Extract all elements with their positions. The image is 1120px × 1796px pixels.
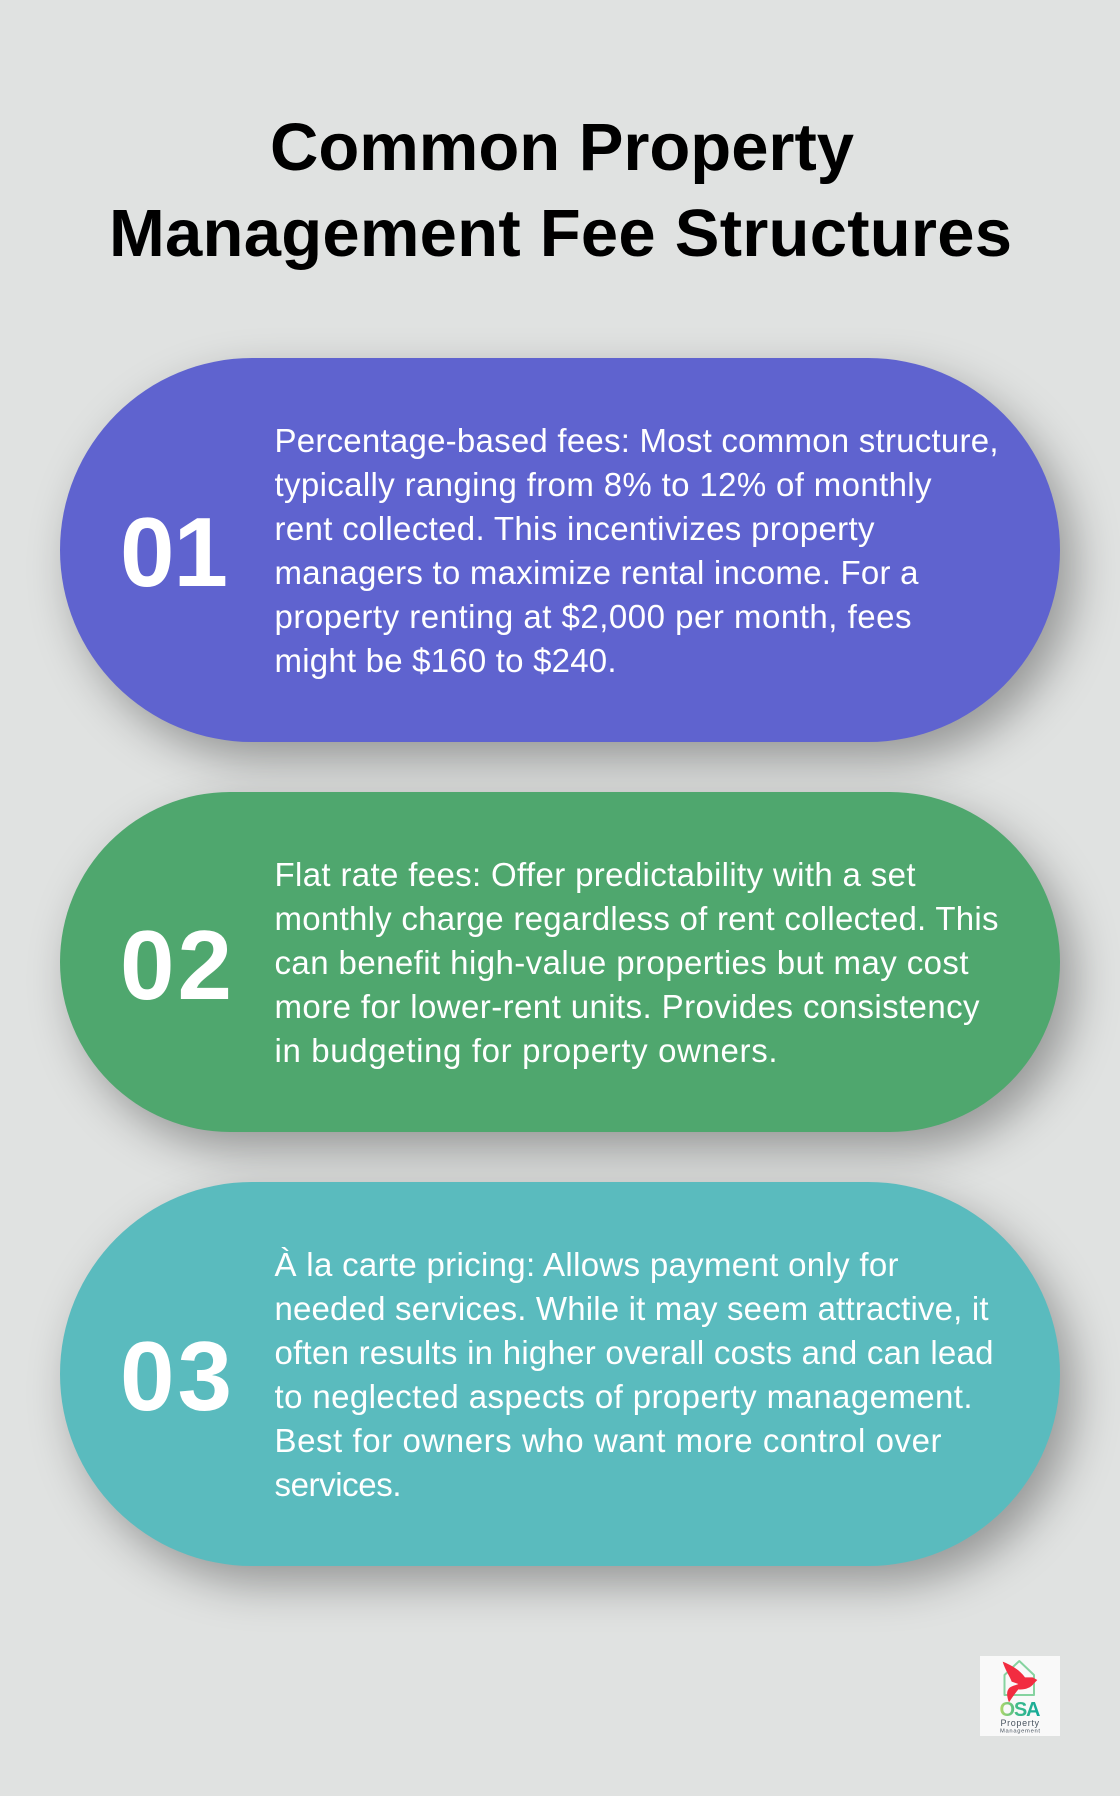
text block 02: more for lower-rent units. Provides consistency	[274, 988, 980, 1025]
logo text: OSA	[1000, 1699, 1040, 1721]
logo: OSA Property Management	[980, 1656, 1060, 1736]
title: Management Fee Structures	[109, 196, 1012, 271]
pill background 01	[60, 358, 1060, 742]
panel: percentage-based fees	[60, 358, 1060, 742]
icon: house outline	[1004, 1661, 1034, 1695]
number 01: 01	[120, 497, 228, 607]
text block 02: Flat rate fees: Offer predictability with a set	[274, 856, 916, 893]
text block 02	[274, 856, 998, 1069]
text block 03: Best for owners who want more control over	[274, 1422, 942, 1459]
text block 03: services.	[274, 1466, 402, 1503]
panel: a la carte pricing	[60, 1182, 1060, 1566]
logo text	[1000, 1699, 1040, 1734]
text block 01: managers to maximize rental income. For a	[274, 554, 919, 591]
text block 01: Percentage-based fees: Most common structure,	[274, 422, 998, 459]
title	[109, 110, 1012, 271]
text block 03: to neglected aspects of property management.	[274, 1378, 972, 1415]
logo text: Property	[1000, 1718, 1040, 1728]
panel: flat rate fees	[60, 792, 1060, 1132]
text block 02: can benefit high-value properties but may cost	[274, 944, 968, 981]
text block 01: rent collected. This incentivizes property	[274, 510, 875, 547]
icon: red bird	[1003, 1662, 1037, 1702]
number 03: 03	[120, 1321, 232, 1431]
pill background 02	[60, 792, 1060, 1132]
pill background 03	[60, 1182, 1060, 1566]
text block 01	[274, 422, 998, 679]
title: Common Property	[270, 110, 854, 185]
text block 03: often results in higher overall costs and can lead	[274, 1334, 994, 1371]
logo text: Management	[1000, 1728, 1040, 1734]
text block 01: might be $160 to $240.	[274, 642, 616, 679]
text block 01: typically ranging from 8% to 12% of monthly	[274, 466, 932, 503]
text block 01: property renting at $2,000 per month, fees	[274, 598, 912, 635]
text block 03: needed services. While it may seem attractive, it	[274, 1290, 988, 1327]
text block 02: monthly charge regardless of rent collected. This	[274, 900, 998, 937]
text block 03	[274, 1246, 994, 1503]
text block 03: À la carte pricing: Allows payment only for	[274, 1246, 898, 1283]
text block 02: in budgeting for property owners.	[274, 1032, 778, 1069]
number 02: 02	[120, 910, 232, 1020]
